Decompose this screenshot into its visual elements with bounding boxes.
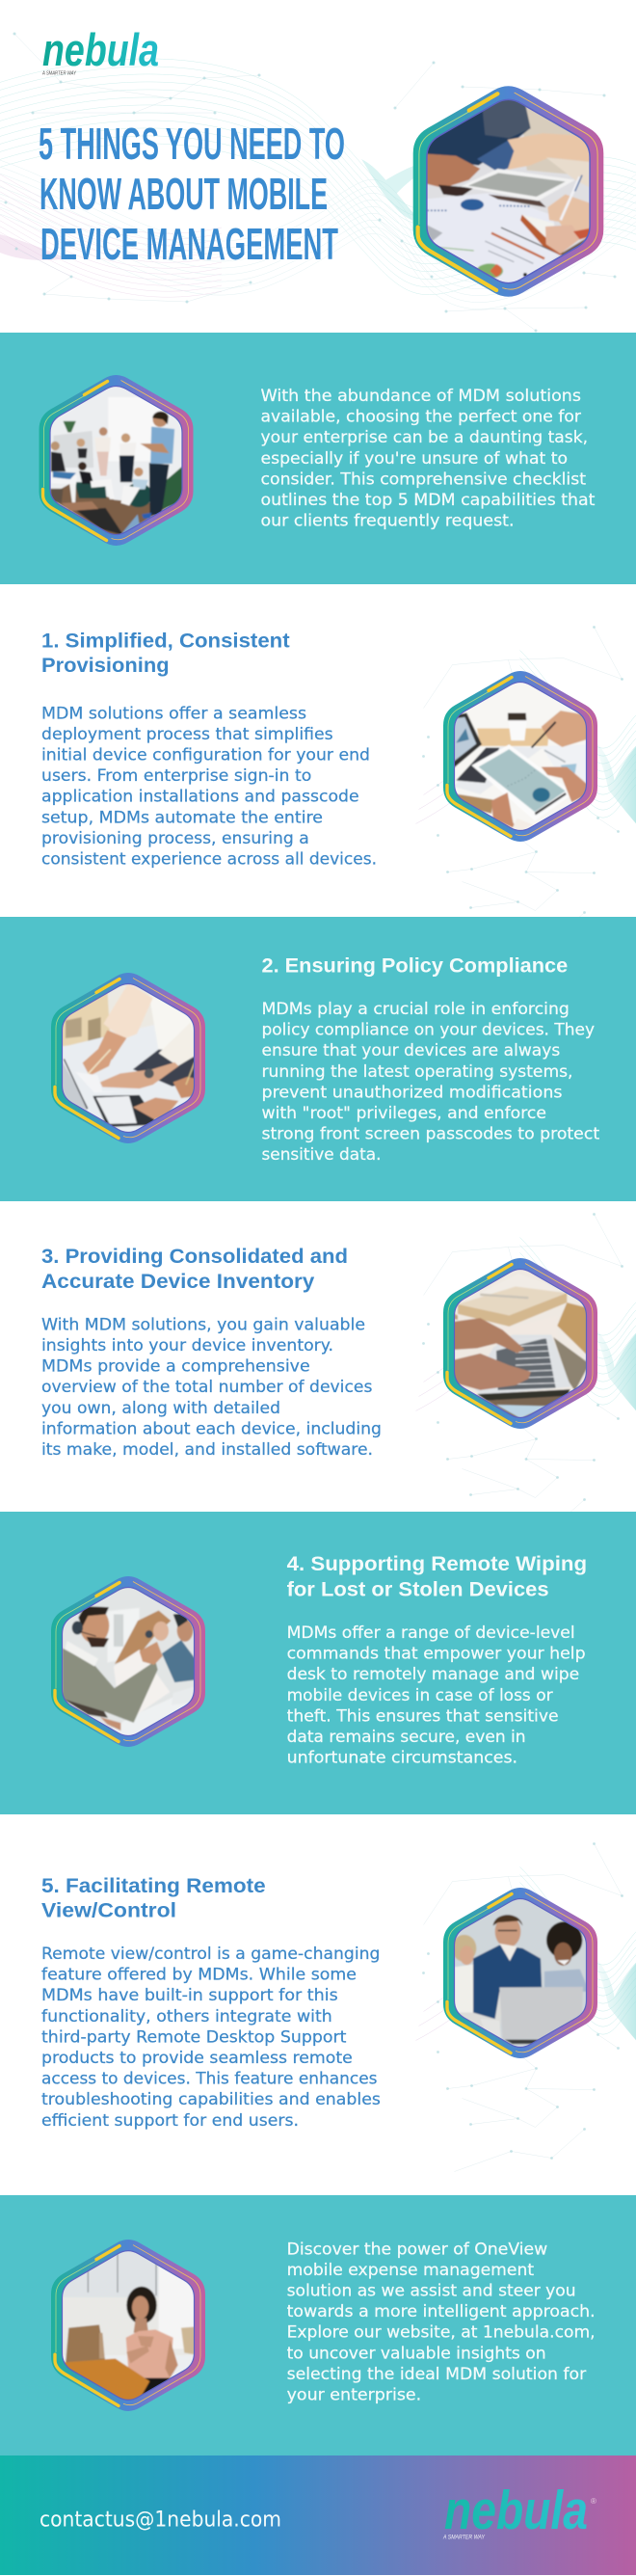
hexagon photo: hands at a laptop [51,973,205,1143]
hexagon photo: help desk agents with headsets [51,1576,205,1747]
side network pattern: section 5 [416,1842,636,2171]
text block: section 1: application installations and passcode [41,788,359,806]
text block: section 1: deployment process that simplifies [41,725,333,743]
text block: section 4: unfortunate circumstances. [287,1749,517,1767]
text block: section 5: access to devices. This feature enhances [41,2070,378,2088]
heading: section 4: for Lost or Stolen Devices [287,1578,549,1601]
heading: section 2: 2. Ensuring Policy Compliance [262,954,568,978]
text block: section 2: sensitive data. [262,1145,382,1164]
text block: section 5: Remote view/control is a game-changing [41,1945,380,1963]
title [39,119,345,269]
footer logo: A SMARTER WAY [442,2536,486,2541]
heading: section 1: Provisioning [41,654,170,677]
hexagon photo: colleagues around a laptop [443,1888,597,2058]
heading: section 4: 4. Supporting Remote Wiping [287,1552,587,1575]
heading: section 5: 5. Facilitating Remote [41,1874,266,1897]
text block: section 1: MDM solutions offer a seamless [41,704,306,722]
heading: section 5: View/Control [41,1899,176,1922]
hexagon photo: tablet and laptop [443,671,597,842]
heading: section 1 [41,629,290,677]
text block: section 2: policy compliance on your devices. They [262,1021,595,1039]
footer logo: nebula [444,2480,588,2541]
text block: section 2 [262,1000,600,1164]
text block: closing: solution as we assist and steer you [287,2281,576,2300]
text block: introduction: available, choosing the perfect one for [260,408,581,426]
title: 5 THINGS YOU NEED TO [39,119,345,169]
text block: introduction: consider. This comprehensive checklist [260,470,587,488]
text block: section 2: ensure that your devices are always [262,1041,560,1060]
text block: closing [287,2240,596,2404]
text block: section 5: MDMs have built-in support for this [41,1986,338,2004]
text block: section 4: desk to remotely manage and wipe [287,1665,579,1683]
text block: section 3: you own, along with detailed [41,1399,280,1417]
text block: section 5: third-party Remote Desktop Support [41,2027,347,2046]
text block: section 3 [41,1315,382,1459]
logo: nebula: A SMARTER WAY [41,71,77,77]
text block: section 4: commands that empower your help [287,1645,586,1663]
text block: section 3: insights into your device inventory. [41,1336,333,1355]
text block: section 4: mobile devices in case of loss or [287,1686,553,1704]
text block: closing: mobile expense management [287,2261,535,2279]
title: KNOW ABOUT MOBILE [40,169,328,219]
text block: introduction: outlines the top 5 MDM capabilities that [260,491,596,509]
text block: section 3: information about each device, including [41,1419,382,1437]
heading: section 3: Accurate Device Inventory [41,1270,314,1293]
text block: section 2: MDMs play a crucial role in enforcing [262,1000,570,1018]
footer logo: ® [591,2497,596,2506]
text block: section 4: theft. This ensures that sensitive [287,1706,559,1725]
text block: section 4 [287,1623,586,1767]
text block: section 5: feature offered by MDMs. While some [41,1966,357,1984]
text block: section 3: its make, model, and installed software. [41,1440,373,1459]
text block: introduction: especially if you're unsure of what to [260,449,568,468]
text block: closing: Explore our website, at 1nebula.com, [287,2323,596,2342]
text block: closing: Discover the power of OneView [287,2240,547,2258]
panel: closing call to action [0,2195,636,2455]
text block: section 3: MDMs provide a comprehensive [41,1357,310,1376]
hexagon photo: typing on a laptop [443,1258,597,1429]
heading: section 4 [287,1552,587,1601]
text block: section 2: with "root" privileges, and enforce [262,1104,546,1122]
heading: section 5 [41,1874,266,1922]
text block: section 3: overview of the total number of devices [41,1378,372,1396]
text block: section 1: consistent experience across all devices. [41,850,377,868]
text block: section 5: functionality, others integrate with [41,2007,332,2026]
text block: closing: to uncover valuable insights on [287,2344,546,2362]
text block: section 5: efficient support for end users. [41,2111,299,2130]
text block: section 2: strong front screen passcodes to protect [262,1125,600,1143]
contact email: contactus@1nebula.com [40,2508,281,2533]
panel: 1. Simplified, Consistent Provisioning [41,629,597,868]
text block: section 1: initial device configuration for your end [41,746,370,764]
hexagon photo: business team reviewing charts on a tablet [413,86,603,297]
text block: closing: towards a more intelligent approach. [287,2302,596,2321]
panel: introduction [0,333,636,584]
text block: section 1: provisioning process, ensuring a [41,829,309,847]
panel: 5. Facilitating Remote View/Control [41,1874,597,2130]
heading: section 3 [41,1245,348,1293]
text block: introduction: our clients frequently request. [260,512,515,530]
text block: introduction: your enterprise can be a daunting task, [260,428,588,446]
text block: introduction [260,387,596,530]
text block: section 4: data remains secure, even in [287,1728,526,1746]
text block: closing: your enterprise. [287,2385,421,2404]
text block: closing: selecting the ideal MDM solution for [287,2365,586,2383]
panel: 3. Providing Consolidated and Accurate Device Inventory [41,1245,597,1459]
heading: section 3: 3. Providing Consolidated and [41,1245,348,1268]
text block: section 5: troubleshooting capabilities and enables [41,2090,381,2108]
hexagon photo: team meeting in office [39,375,193,546]
text block: section 1 [41,704,377,868]
hero background pattern [0,33,636,332]
panel: 4. Supporting Remote Wiping for Lost or Stolen Devices [0,1512,636,1814]
text block: section 5 [41,1945,381,2130]
text block: section 1: users. From enterprise sign-in to [41,766,311,785]
text block: section 1: setup, MDMs automate the entire [41,808,323,826]
heading: section 1: 1. Simplified, Consistent [41,629,290,652]
footer [0,2455,636,2575]
title: DEVICE MANAGEMENT [40,219,338,269]
text block: introduction: With the abundance of MDM solutions [260,387,581,405]
logo: nebula: nebula [42,24,159,75]
panel: 2. Ensuring Policy Compliance [0,917,636,1201]
side network pattern: section 3 [416,1213,636,1543]
text block: section 4: MDMs offer a range of device-level [287,1623,575,1642]
text block: section 5: products to provide seamless remote [41,2049,353,2067]
side network pattern: section 1 [416,626,636,954]
text block: section 2: prevent unauthorized modifications [262,1083,563,1101]
hexagon photo: presenter smiling at an audience [51,2240,205,2422]
text block: section 2: running the latest operating systems, [262,1062,572,1081]
text block: section 3: With MDM solutions, you gain valuable [41,1315,365,1333]
